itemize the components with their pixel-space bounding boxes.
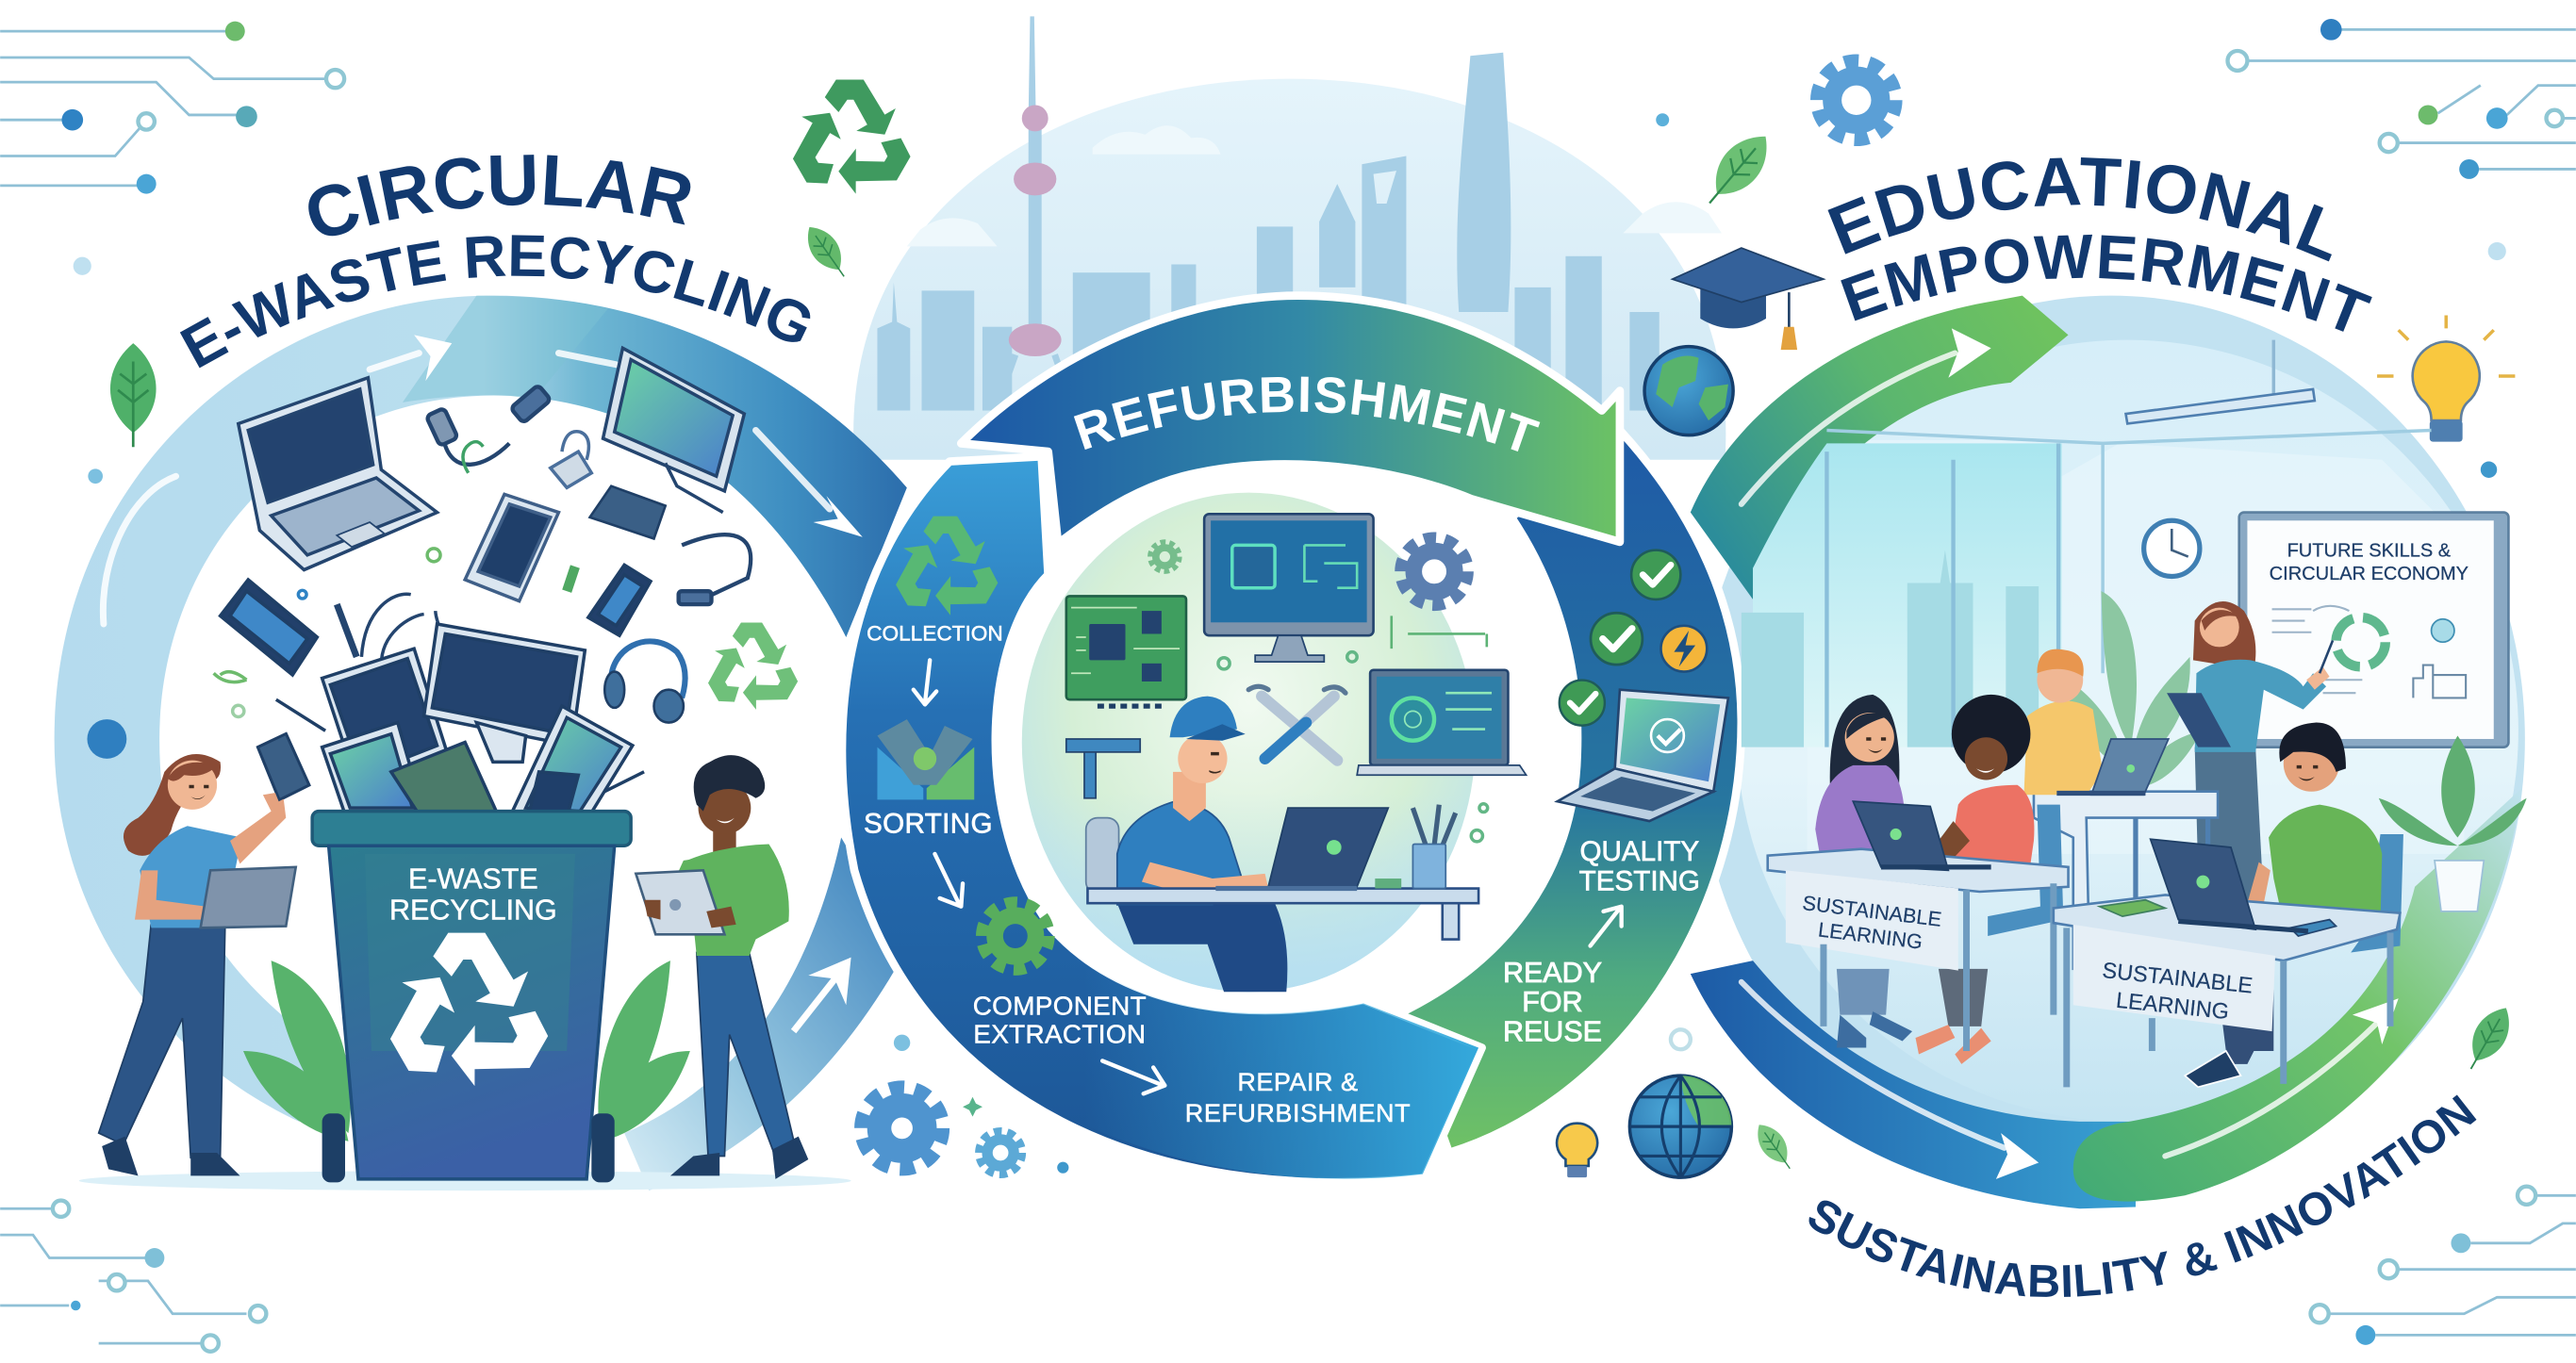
icon: headphones [604, 641, 685, 723]
icon: laptop with gauge [1357, 670, 1527, 775]
icon: leaf bottom centre [1749, 1118, 1800, 1175]
bin label: E-WASTE [408, 863, 538, 895]
stage icons: quality checks [1558, 550, 1728, 821]
icon: leaf lower right [2457, 1000, 2519, 1076]
title: circular: CIRCULAR [308, 155, 690, 236]
icon: lightbulb right [2377, 315, 2515, 442]
stage: sorting: SORTING [864, 808, 993, 839]
caption: sustainability and innovation: SUSTAINABILITY & INNOVATION [1808, 1095, 2476, 1297]
stage label: ready for reuse: READY [1503, 957, 1602, 989]
icon: leaf far left [110, 343, 157, 447]
person legs under right desk [2218, 985, 2273, 1064]
icon: gear [1402, 539, 1466, 604]
icon: small phone [588, 565, 651, 635]
chair by green student [2351, 834, 2403, 952]
stage label: ready for reuse: FOR [1522, 986, 1583, 1018]
circuit lines top right [2228, 19, 2576, 478]
front right desk: SUSTAINABLE [2101, 958, 2254, 998]
small circuit marks [1392, 616, 1487, 649]
stage: quality testing [1579, 836, 1700, 896]
icon: gear top right [1819, 62, 1894, 138]
icon: tablet left [221, 580, 317, 675]
stage: repair and refurbishment: REFURBISHMENT [1185, 1099, 1411, 1127]
stage: quality testing: QUALITY [1579, 836, 1699, 867]
dots below ring [894, 113, 1691, 1174]
front left desk: SUSTAINABLE [1801, 891, 1943, 931]
panel: classroom [1742, 340, 2527, 1087]
stage: component extraction: COMPONENT [973, 992, 1147, 1021]
icon: globe bottom [1629, 1076, 1731, 1177]
arrow: extraction to repair [1102, 1060, 1164, 1093]
front left desk: LEARNING [1817, 917, 1924, 954]
whiteboard [2239, 513, 2508, 747]
person: teacher [2167, 601, 2333, 903]
stage: repair and refurbishment [1185, 1068, 1411, 1127]
arrow: sorting to component extraction [934, 854, 963, 907]
stage label: ready for reuse: REUSE [1503, 1016, 1602, 1048]
pile of devices [258, 624, 644, 818]
left ring arrow [55, 296, 907, 1191]
front right desk [2054, 895, 2400, 1087]
floor shadow [79, 1171, 851, 1191]
arrow: collection to sorting [914, 660, 936, 704]
potted plant [2379, 735, 2527, 911]
front right laptop [2151, 839, 2308, 931]
icon: bulb bottom [1557, 1124, 1597, 1177]
panel: technician workshop [1022, 493, 1527, 992]
icon: cables [214, 385, 751, 682]
icon: earth [1644, 347, 1733, 435]
front left laptop [1853, 801, 1991, 870]
illustration: recycling bin with devices [79, 624, 851, 1191]
whiteboard: FUTURE SKILLS & [2287, 541, 2452, 562]
icon: monitor with chip [1204, 514, 1374, 662]
title: educational: EDUCATIONAL [1827, 157, 2332, 262]
stage: component extraction: EXTRACTION [973, 1019, 1146, 1048]
stage label: ready for reuse [1503, 957, 1602, 1048]
icon: gear bottom large [863, 1089, 941, 1167]
icon: leaf top centre [1694, 124, 1780, 216]
arrow: ready to testing [1591, 907, 1622, 945]
icon: recycle top [777, 80, 916, 208]
icon: laptop on desk [1215, 808, 1388, 889]
person: student green [2228, 723, 2382, 923]
title: empowerment: EMPOWERMENT [1841, 234, 2372, 332]
bin label: RECYCLING [389, 895, 557, 927]
stage: component extraction [973, 992, 1147, 1048]
stage: quality testing: TESTING [1579, 865, 1700, 896]
bin label [389, 863, 557, 927]
icon: crossed wrench and screwdriver [1248, 686, 1346, 761]
icon: phone [465, 494, 558, 601]
icon: recycle green [696, 623, 802, 721]
city skyline panel [853, 16, 1726, 460]
right ring base and classroom room [1697, 296, 2525, 1182]
front right desk: LEARNING [2115, 988, 2230, 1024]
bin wheels [322, 1113, 615, 1182]
desk [1087, 889, 1478, 940]
person: technician [1086, 697, 1287, 992]
middle ring: refurbishment arrow [957, 291, 1624, 547]
icon: leaf top left [799, 220, 855, 284]
ceiling lamp [2126, 340, 2315, 423]
person: student red [1916, 695, 2034, 1064]
circuit lines bottom right [2310, 1187, 2576, 1345]
bin body [329, 846, 615, 1179]
icon: router [590, 486, 666, 538]
person: woman with phone and tablet [99, 734, 309, 1175]
person: student yellow [2023, 649, 2103, 795]
icon: circuit board [1066, 596, 1186, 706]
icon: padlock [551, 432, 591, 487]
back desk [2034, 792, 2218, 969]
icon: small gear [1150, 543, 1179, 571]
stage: repair and refurbishment: REPAIR & [1237, 1068, 1359, 1096]
person: student purple [1815, 695, 1912, 1048]
icon: caliper tool [1066, 739, 1140, 798]
bin lid [312, 812, 631, 846]
icon: gear bottom small [980, 1132, 1021, 1174]
title: e-waste recycling: E-WASTE RECYCLING [179, 235, 811, 368]
circuit lines top left [0, 22, 344, 484]
icon: laptop [239, 378, 438, 570]
wall clock [2144, 520, 2200, 577]
middle ring: dark to green arrow [1399, 430, 1742, 1153]
stage: collection: COLLECTION [867, 621, 1003, 645]
stage: sorting [864, 719, 993, 839]
bin recycle icon [369, 933, 555, 1106]
person: man with tablet [636, 755, 808, 1179]
icon: tool cup [1412, 805, 1456, 889]
icon: back laptop [2056, 739, 2169, 795]
icon: green gear [983, 904, 1048, 968]
sneaker [2185, 1051, 2240, 1087]
icon: graduation cap [1673, 248, 1824, 350]
circuit lines bottom left [0, 1201, 266, 1352]
heading: refurbishment: REFURBISHMENT [1073, 377, 1541, 452]
icon: small rings [233, 549, 440, 716]
right ring arrows [1691, 296, 2521, 1208]
small rings [1218, 652, 1488, 842]
illustration: flying e-waste [214, 348, 802, 723]
plant behind students [2062, 591, 2202, 788]
middle ring: blue collection to repair arrow [842, 456, 1482, 1182]
icon: monitor [603, 348, 744, 513]
stage: collection [867, 517, 1003, 645]
icon: sparkle [963, 1097, 983, 1117]
whiteboard: CIRCULAR ECONOMY [2270, 564, 2469, 584]
leaves behind bin [243, 961, 690, 1141]
classroom windows [1742, 443, 2062, 747]
chair by red student [1988, 805, 2063, 936]
front left desk [1768, 849, 2069, 1051]
